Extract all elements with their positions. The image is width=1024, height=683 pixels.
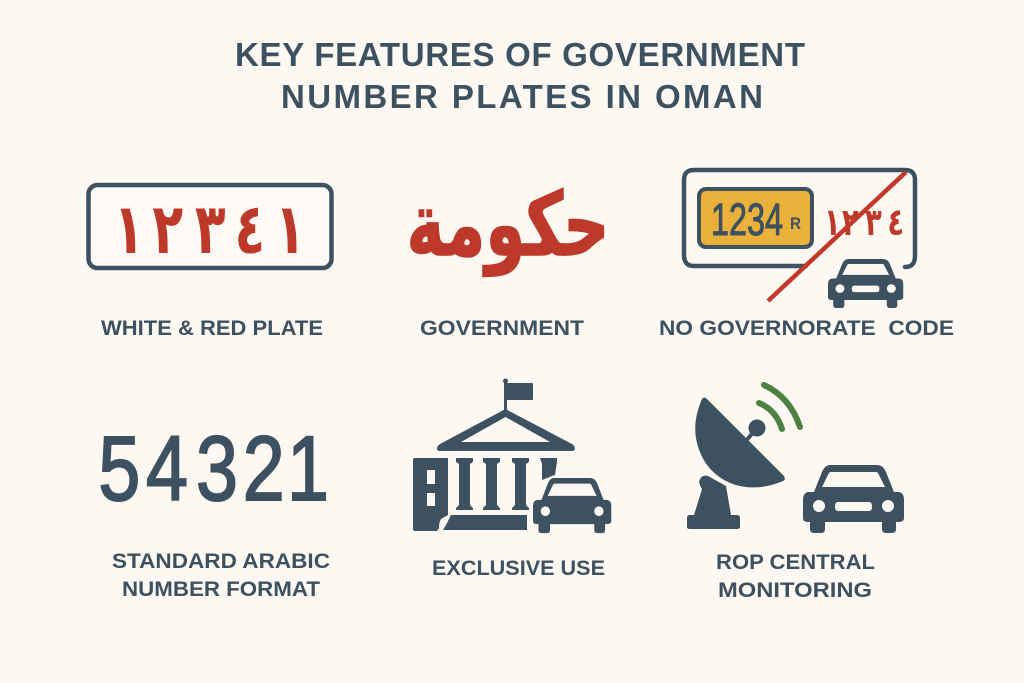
label: EXCLUSIVE USE bbox=[432, 557, 605, 580]
panel: standard arabic number format bbox=[98, 417, 330, 601]
icon: plate frame bbox=[88, 185, 332, 268]
icon: plate frame bbox=[684, 170, 915, 267]
label: NUMBER FORMAT bbox=[122, 578, 320, 601]
panel: rop central monitoring bbox=[687, 385, 904, 602]
yellow plate letter: R bbox=[790, 214, 801, 233]
arabic word government: حكومة bbox=[406, 173, 610, 277]
label bbox=[112, 550, 330, 601]
label: ROP CENTRAL bbox=[716, 551, 875, 574]
panel: exclusive use bbox=[413, 378, 611, 580]
panel: white and red plate bbox=[88, 185, 332, 340]
title: NUMBER PLATES IN OMAN bbox=[281, 78, 763, 115]
icon: car bbox=[533, 478, 611, 533]
red strike line bbox=[768, 172, 906, 301]
yellow plate number: 1234 bbox=[711, 194, 783, 245]
label: NO GOVERNORATE CODE bbox=[659, 317, 954, 340]
icon: car bbox=[828, 259, 903, 308]
title: KEY FEATURES OF GOVERNMENT bbox=[235, 36, 805, 73]
icon: government building bbox=[413, 378, 575, 531]
label: STANDARD ARABIC bbox=[112, 550, 330, 573]
label: MONITORING bbox=[718, 579, 872, 602]
icon: car bbox=[803, 465, 904, 533]
label bbox=[716, 551, 875, 602]
yellow plate bbox=[699, 189, 812, 247]
label: GOVERNMENT bbox=[420, 317, 584, 340]
title bbox=[235, 36, 805, 115]
crossed out arabic code: ١٢٣٤ bbox=[824, 199, 904, 244]
plate number in red: ١٢٣٤١ bbox=[113, 189, 306, 270]
icon: signal waves bbox=[759, 385, 800, 429]
large numerals: 54321 bbox=[98, 417, 329, 520]
label: WHITE & RED PLATE bbox=[101, 317, 323, 340]
icon: satellite dish bbox=[687, 398, 785, 529]
panel: government bbox=[406, 173, 610, 340]
panel: no governorate code bbox=[659, 170, 954, 340]
